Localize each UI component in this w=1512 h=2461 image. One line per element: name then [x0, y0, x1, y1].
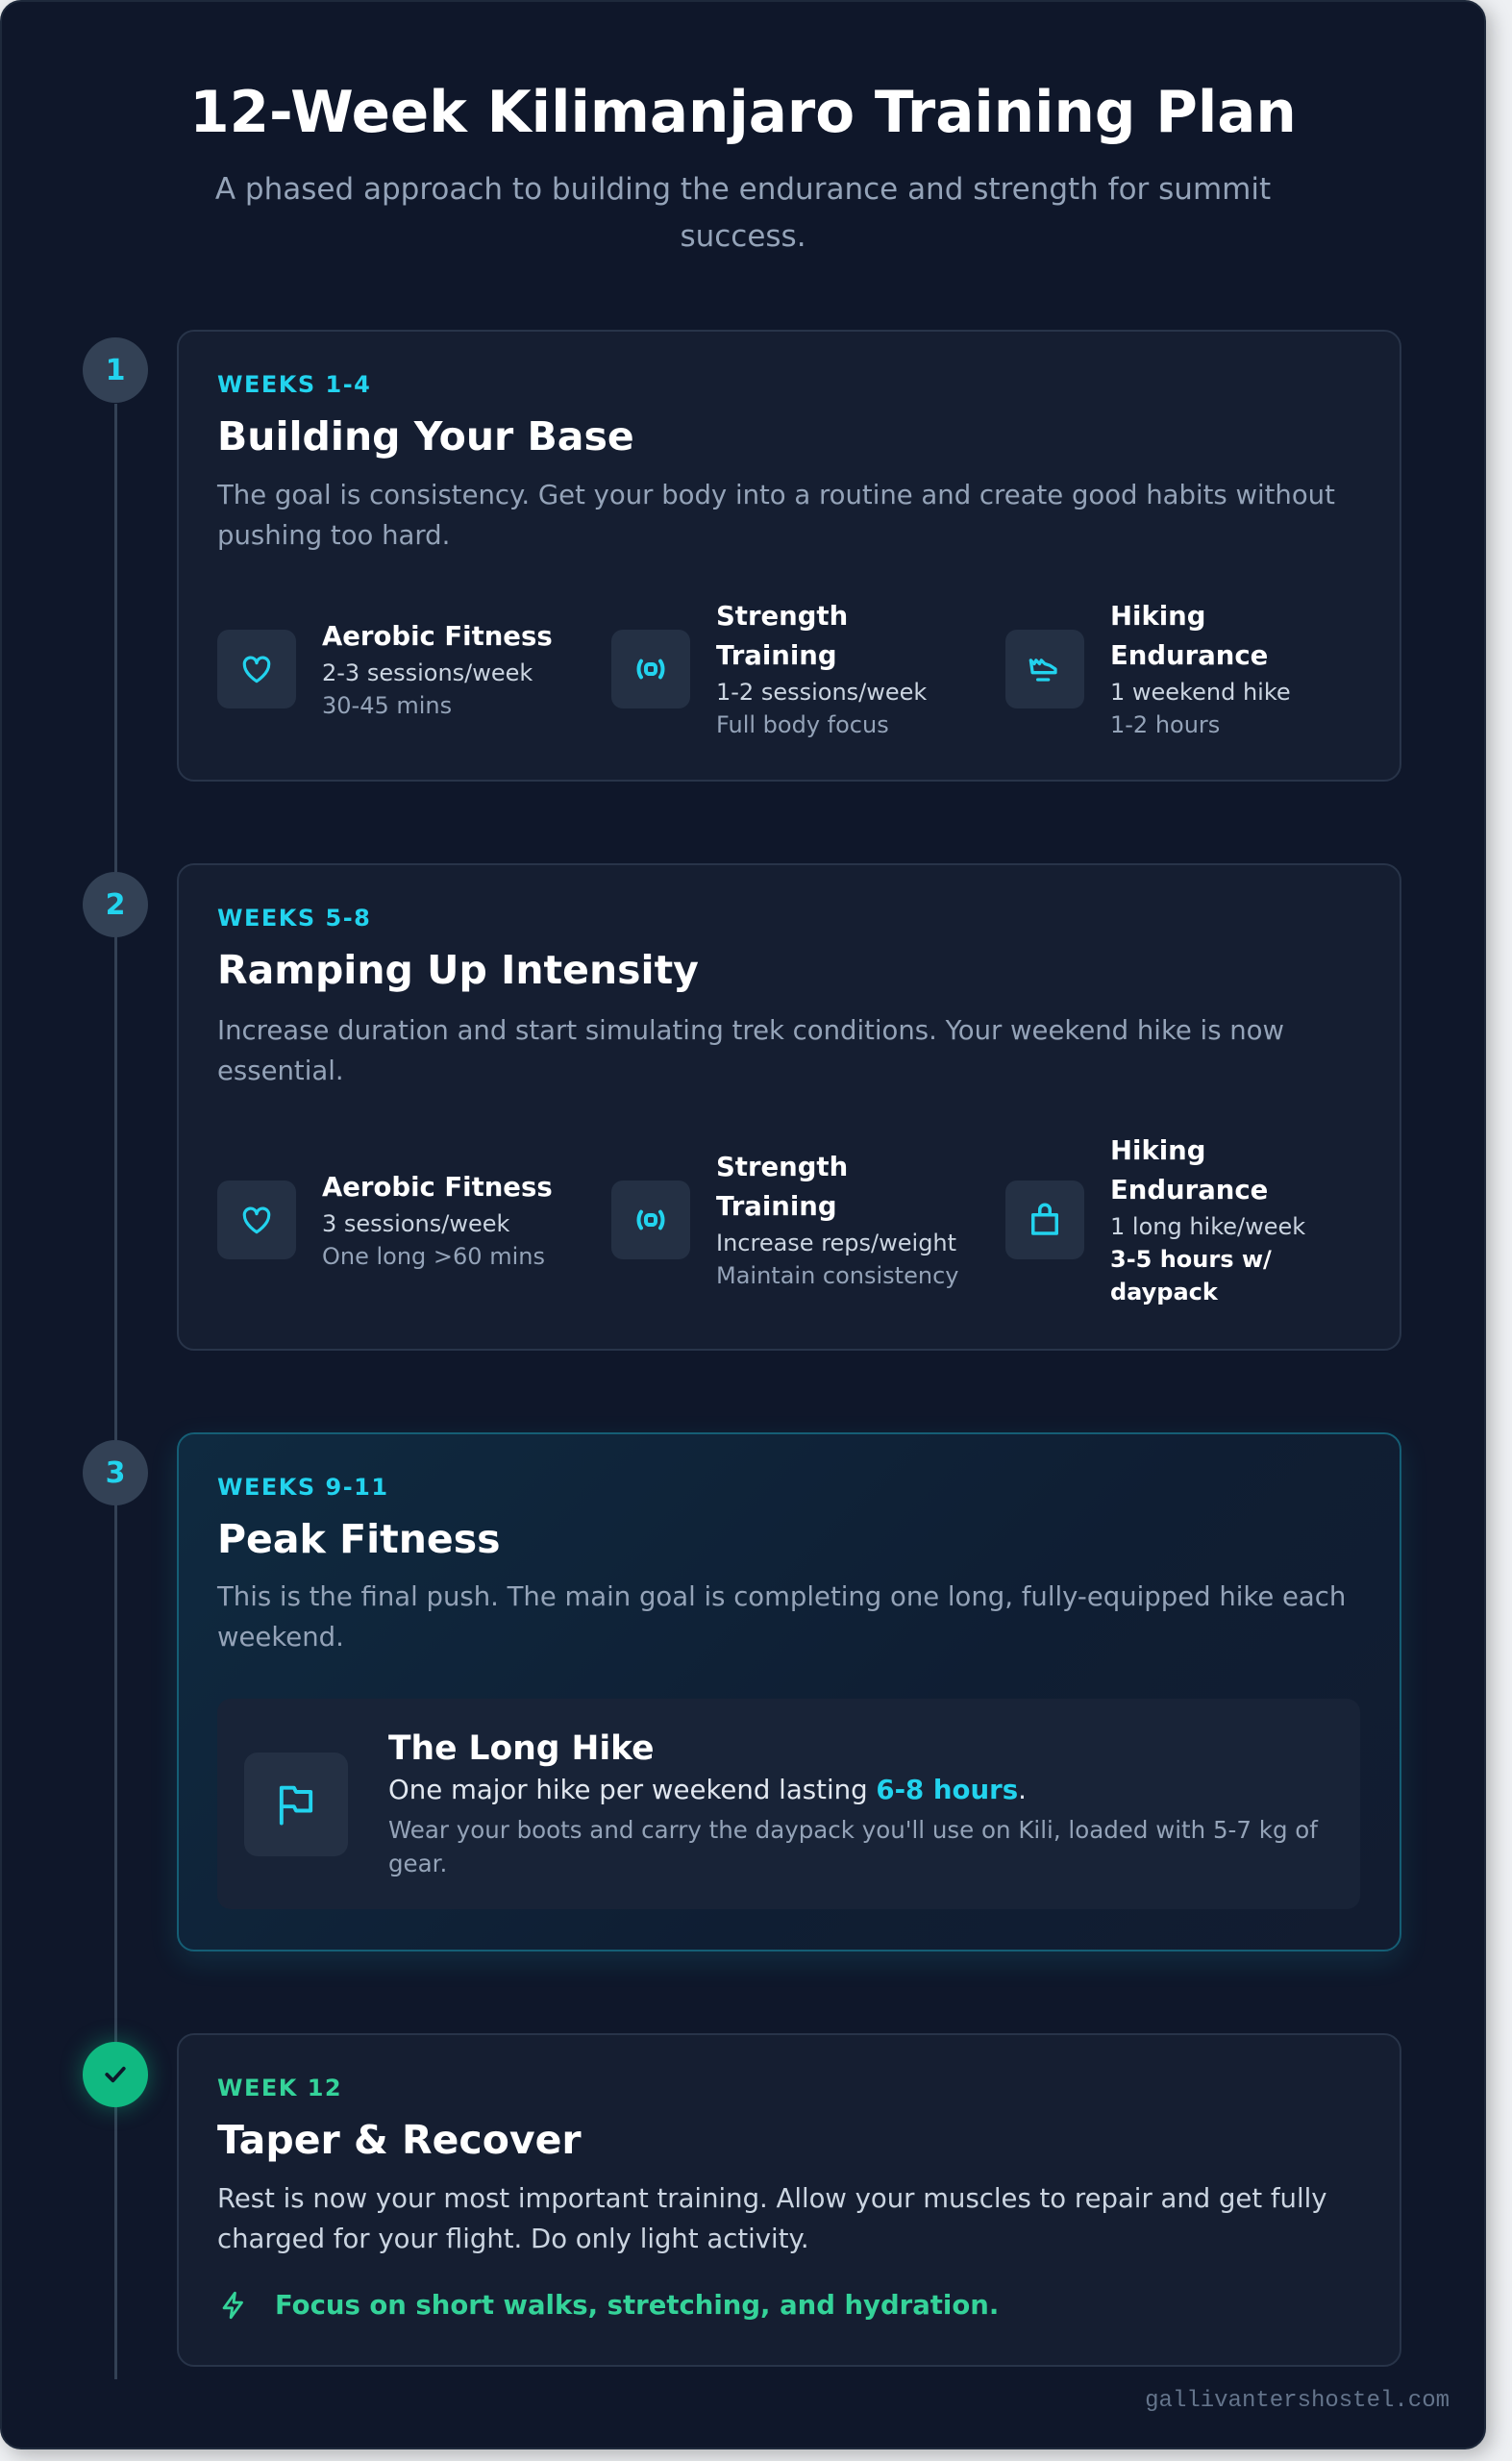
description: Rest is now your most important training. Allow your muscles to repair and get fully charged for your flight. Do only light activity. — [217, 2183, 1327, 2254]
callout: long hike — [217, 1699, 1360, 1909]
item: aerobic: Aerobic Fitness — [322, 1171, 553, 1202]
item: aerobic: 30-45 mins — [322, 692, 452, 719]
item: strength: Strength — [716, 1152, 848, 1182]
item: hiking: 1 long hike/week — [1110, 1213, 1305, 1240]
item: strength: Strength — [716, 601, 848, 632]
panel: weeks 5-8 — [177, 863, 1401, 1351]
item: strength: Training — [716, 1191, 837, 1222]
heading: Peak Fitness — [217, 1516, 501, 1562]
description: The goal is consistency. Get your body into a routine and create good habits without pushing too hard. — [217, 480, 1335, 551]
label: WEEK 12 — [217, 2075, 342, 2101]
heading: Taper & Recover — [217, 2117, 582, 2163]
callout text: The Long Hike — [388, 1729, 655, 1768]
item: hiking — [1005, 1135, 1305, 1305]
items row — [217, 601, 1291, 738]
label: WEEKS 5-8 — [217, 905, 371, 932]
item: hiking: 1-2 hours — [1110, 711, 1220, 738]
callout text: One major hike per weekend lasting 6-8 hours. — [388, 1774, 1027, 1805]
item: hiking: daypack — [1110, 1279, 1218, 1305]
item: aerobic: One long >60 mins — [322, 1242, 545, 1269]
item: hiking: Hiking — [1110, 601, 1205, 632]
callout text — [388, 1729, 1319, 1877]
heading: Ramping Up Intensity — [217, 947, 699, 993]
item: aerobic — [217, 621, 553, 719]
item: strength — [611, 601, 927, 738]
item: strength: Increase reps/weight — [716, 1230, 956, 1256]
description: This is the final push. The main goal is completing one long, fully-equipped hike each weekend. — [217, 1581, 1346, 1653]
step circle 2 — [83, 872, 148, 937]
step circle 1 — [83, 337, 148, 403]
panel: weeks 9-11 — [177, 1432, 1401, 1951]
item: strength: 1-2 sessions/week — [716, 679, 927, 706]
step circle check — [83, 2042, 148, 2107]
heading: Building Your Base — [217, 413, 634, 460]
label: WEEKS 1-4 — [217, 371, 371, 398]
panel: weeks 1-4 — [177, 330, 1401, 782]
item: strength: Full body focus — [716, 711, 889, 738]
step circle 1: 1 — [106, 354, 125, 386]
item: aerobic: Aerobic Fitness — [322, 621, 553, 652]
items row — [217, 1135, 1305, 1305]
step circle 3 — [83, 1440, 148, 1505]
timeline line — [114, 404, 117, 2379]
item: hiking: 3-5 hours w/ — [1110, 1246, 1272, 1273]
step circle 3: 3 — [106, 1455, 125, 1490]
step circle 2: 2 — [106, 888, 125, 921]
item: hiking: Endurance — [1110, 640, 1268, 671]
footer: gallivantershostel.com — [1145, 2388, 1450, 2414]
item: hiking: Endurance — [1110, 1175, 1268, 1206]
item: strength: Maintain consistency — [716, 1262, 958, 1289]
item: strength: Training — [716, 640, 837, 671]
panel: week 12 — [177, 2033, 1401, 2367]
tip with bolt icon: Focus on short walks, stretching, and hydration. — [275, 2290, 999, 2321]
item: aerobic — [217, 1171, 553, 1269]
item: hiking: Hiking — [1110, 1135, 1205, 1166]
callout text: Wear your boots and carry the daypack you'll use on Kili, loaded with 5-7 kg of gear. — [388, 1816, 1318, 1877]
item: strength — [611, 1152, 958, 1289]
title: 12-Week Kilimanjaro Training Plan — [189, 80, 1297, 146]
item: hiking — [1005, 601, 1291, 738]
item: hiking: 1 weekend hike — [1110, 679, 1291, 706]
item: aerobic: 2-3 sessions/week — [322, 659, 533, 686]
label: WEEKS 9-11 — [217, 1474, 389, 1501]
item: aerobic: 3 sessions/week — [322, 1209, 509, 1236]
icon: flag — [244, 1753, 348, 1856]
subtitle: A phased approach to building the endurance and strength for summit success. — [215, 172, 1271, 254]
description: Increase duration and start simulating trek conditions. Your weekend hike is now essential. — [217, 1015, 1284, 1086]
